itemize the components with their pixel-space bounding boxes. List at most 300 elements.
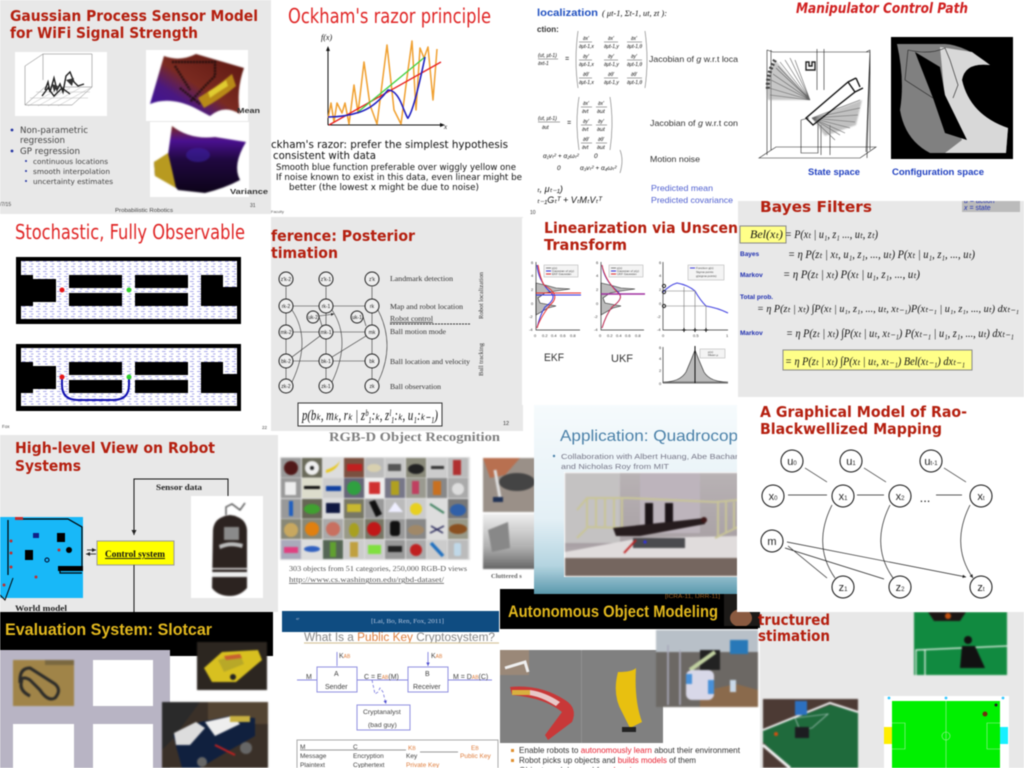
text: network layer labels: Ball motion mode <box>390 327 447 336</box>
heading: autonomous object modeling: [ICRA-11, IJRR-11] <box>665 594 721 600</box>
chart: EKF: 0 <box>534 333 537 338</box>
arrows: world model to control <box>86 550 96 554</box>
text: UKF label: UKF <box>611 353 633 365</box>
chart: UKF: 0 <box>599 333 602 338</box>
chart: soccer field particles <box>884 696 1009 768</box>
text: bullet list: smooth interpolation <box>33 168 110 176</box>
text: Jacobian and noise descriptions: Jacobian of g w.r.t con <box>650 118 738 128</box>
panel: Gaussian process sensor model <box>0 0 271 214</box>
text: network layer labels <box>390 272 485 391</box>
heading: high-level view <box>15 439 215 475</box>
text: robot modeling bullets: Robot picks up objects and builds models of them <box>519 755 696 765</box>
diagram: dynamic Bayes network: zk-1 <box>321 384 331 390</box>
diagram: dynamic Bayes network: bk <box>369 359 375 365</box>
diagram: sender receiver: B <box>425 671 430 678</box>
heading: application quadrocopter: Application: Quadrocop <box>560 428 738 445</box>
chart: Jacobian of g w.r.t location: ∂μt-1,y <box>604 62 619 68</box>
chart: EKF <box>529 260 581 338</box>
diagram: sender receiver: Sender <box>325 684 348 691</box>
diagram: sender receiver: KAB <box>431 653 443 660</box>
chart: Jacobian of g w.r.t control <box>538 97 612 151</box>
panel: inference posterior estimation <box>271 217 523 431</box>
chart: Jacobian of g w.r.t location: ∂x' <box>608 36 615 42</box>
chart: Jacobian of g w.r.t control: ∂θ' <box>583 137 590 143</box>
text: robot modeling bullets <box>511 745 741 768</box>
formula: result <box>783 350 972 370</box>
text: network layer labels: Robot control <box>390 314 433 323</box>
heading: autonomous object modeling: Autonomous Object Modeling <box>508 603 718 621</box>
formula: posterior <box>298 403 442 426</box>
chart: UKF: 0.8 <box>635 333 641 338</box>
chart: Jacobian of g w.r.t location: ∂μt-1,θ <box>627 44 642 50</box>
diagram: dynamic Bayes network: z'k-2 <box>281 277 291 283</box>
photo: instrumented slot car <box>162 702 268 768</box>
diagram: Rao-Blackwellized network: z2 <box>896 582 905 594</box>
diagram: dynamic Bayes network: bk-1 <box>321 359 331 365</box>
text: network layer labels: Ball tracking <box>479 343 485 376</box>
formula: total probability <box>740 294 1019 315</box>
chart: policy map 2 with path <box>16 344 241 411</box>
table: terminology <box>297 740 498 768</box>
text: collaboration: Collaboration with Albert Huang, Abe Bachar <box>561 454 739 461</box>
heading: Gaussian process: Gaussian Process Sensor Model <box>10 7 258 25</box>
chart: Jacobian of g w.r.t location: (ut, μt-1) <box>538 53 557 59</box>
formula: result: = η P(zₜ | xₜ) ∫P(xₜ | uₜ, xₜ₋₁) Bel(xₜ₋₁) dxₜ₋₁ <box>785 354 965 368</box>
box: control system <box>97 541 174 565</box>
heading: evaluation system: Evaluation System: Slotcar <box>5 620 212 639</box>
text: slide number: Fox <box>2 424 10 429</box>
chart: Jacobian of g w.r.t control: = <box>567 120 571 127</box>
chart: EKF: 2 <box>531 287 534 292</box>
diagram: Rao-Blackwellized network: u0 <box>787 456 797 468</box>
chart: function g with sigma points: Sigma points <box>696 270 714 274</box>
chart: EKF: 0.8 <box>570 333 576 338</box>
diagram: sender receiver: (bad guy) <box>368 722 397 729</box>
diagram: sender receiver: Cryptanalyst <box>363 709 401 716</box>
diagram: sender receiver: A <box>334 671 339 678</box>
banner: citation: [Lai, Bo, Ren, Fox, 2011] <box>371 618 444 625</box>
chart: 3D WiFi signal scatter <box>15 52 107 116</box>
formula: belief: Bel(xₜ) <box>750 227 783 241</box>
chart: EKF: Gaussian of p(y) <box>552 269 574 273</box>
chart: UKF: 0.4 <box>616 333 622 338</box>
chart: EKF: 4 <box>531 273 534 278</box>
photo: mobile robot <box>191 496 263 598</box>
chart: function g with sigma points: -2 <box>657 314 661 319</box>
chart: function g with sigma points: Function g(x) <box>696 266 714 270</box>
diagram: Rao-Blackwellized network: u1 <box>846 456 856 468</box>
text: slide footer: Probabilistic Robotics <box>115 208 174 214</box>
chart: Gaussian: Mean μ <box>708 353 718 357</box>
table: terminology: Message <box>300 753 327 760</box>
panel: public key cryptosystem <box>282 611 500 768</box>
diagram: Rao-Blackwellized network: zt <box>977 582 985 594</box>
formula: Markov step 2: Markov <box>740 330 763 337</box>
table: terminology: EB <box>471 745 479 752</box>
diagram: Rao-Blackwellized network: m <box>767 536 777 548</box>
text: network layer labels: Ball observation <box>390 382 441 391</box>
chart: UKF: 2 <box>596 287 599 292</box>
text: bullet list: Non-parametric <box>20 126 88 136</box>
heading: linearization: Linearization via Unscen <box>544 219 738 237</box>
text: predicted mean and covariance: Predicted mean <box>651 183 713 193</box>
chart: Jacobian of g w.r.t location: ∂μt-1,θ <box>627 62 642 68</box>
text: Ockham footer: Faculty <box>271 209 284 214</box>
chart: motion noise matrix <box>543 150 622 173</box>
text: slide footer: /7/15 <box>0 202 11 208</box>
heading: structured estimation: stimation <box>758 627 830 645</box>
chart: policy map 1 <box>16 257 241 324</box>
table: terminology: Public Key <box>460 753 491 760</box>
chart: UKF: UKF Gaussian <box>617 272 637 276</box>
chart: Gaussian: 2 <box>659 368 662 373</box>
table: terminology: M <box>300 744 305 751</box>
chart: UKF: 0.6 <box>625 333 631 338</box>
chart: EKF: 0 <box>531 301 534 306</box>
photo: cluttered scene <box>483 458 538 512</box>
text: Jacobian and noise descriptions: Motion noise <box>650 154 700 164</box>
chart: Jacobian of g w.r.t location: ∂μt-1,θ <box>627 80 642 86</box>
chart: EKF: -2 <box>529 314 533 319</box>
arrow: control output <box>133 565 135 612</box>
diagram: sender receiver: M <box>306 674 312 681</box>
table: terminology: Encryption <box>353 753 384 760</box>
text: sensor data label: Sensor data <box>156 482 203 492</box>
diagram: sender receiver: KAB <box>339 653 351 660</box>
text: network layer labels: Map and robot location <box>390 302 463 311</box>
text: network layer labels: Landmark detection <box>390 274 453 283</box>
chart: Jacobian of g w.r.t control: ∂x' <box>583 101 590 107</box>
text: predicted mean and covariance: ₜ, μₜ₋₁) <box>537 184 563 194</box>
chart: function g with sigma points: 6 <box>659 260 662 265</box>
chart: Jacobian of g w.r.t control: ∂vt <box>582 109 589 115</box>
formula: total probability: Total prob. <box>740 294 773 301</box>
text: slide number: 22 <box>262 425 268 430</box>
legend: state: x = state <box>963 205 991 212</box>
text: dataset description <box>289 564 467 584</box>
diagram: dynamic Bayes network: rk-2 <box>282 304 291 310</box>
chart: Jacobian of g w.r.t control: ∂vt <box>582 127 589 133</box>
panel: graphical model of Rao-Blackwellized mapping <box>737 397 1024 612</box>
chart: UKF: 0.2 <box>607 333 613 338</box>
photo grid: object categories <box>280 457 470 560</box>
diagram: Rao-Blackwellized network: x0 <box>769 491 778 503</box>
chart: Jacobian of g w.r.t control: ∂ωt <box>597 145 605 151</box>
diagram: dynamic Bayes network: uk-2 <box>308 315 318 321</box>
heading: graphical model: Blackwellized Mapping <box>760 420 942 438</box>
legend: state: u = action <box>964 198 995 205</box>
chart: motion noise matrix: α₁vₜ² + α₂ωₜ² <box>543 153 580 160</box>
chart: Jacobian of g w.r.t location: ∂y' <box>608 54 615 60</box>
chart: variance surface <box>150 122 249 197</box>
diagram: dynamic Bayes network: uk-1 <box>352 315 362 321</box>
chart: Jacobian of g w.r.t control: ∂y' <box>598 119 605 125</box>
chart: configuration space map <box>891 37 1013 159</box>
chart: UKF: 6 <box>596 260 599 265</box>
text: mean label: Mean <box>237 106 261 115</box>
heading: localization: localization <box>537 8 598 19</box>
heading: high-level view: Systems <box>15 457 81 475</box>
chart: EKF: 6 <box>531 260 534 265</box>
chart: function g with sigma points: 0 <box>662 333 665 338</box>
photo: soccer robots overhead <box>914 612 1007 675</box>
text: predicted mean and covariance: ₜ₋₁Gₜᵀ + VₜMₜVₜᵀ <box>537 195 603 205</box>
text: collaboration <box>553 454 739 471</box>
heading: localization: ( μt-1, Σt-1, ut, zt ): <box>602 9 667 18</box>
banner: citation <box>282 611 499 632</box>
chart: Jacobian of g w.r.t location: ∂μt-1,y <box>604 44 619 50</box>
chart: Jacobian of g w.r.t control: ∂x' <box>598 101 605 107</box>
diagram: dynamic Bayes network: z'k <box>369 277 375 283</box>
chart: Jacobian of g w.r.t control: ∂ut <box>542 125 549 131</box>
heading: evaluation system <box>0 612 273 656</box>
panel: Ockham's razor <box>271 0 530 217</box>
formula: Bayes step: Bayes <box>740 251 760 258</box>
text: robot modeling bullets: Enable robots to autonomously learn about their environment <box>519 745 741 755</box>
photo: slot car track <box>13 660 74 706</box>
heading: autonomous object modeling <box>500 589 758 629</box>
chart: Jacobian of g w.r.t location: ∂y' <box>631 54 638 60</box>
chart: EKF: 0.6 <box>560 333 566 338</box>
table: terminology: C <box>353 744 358 751</box>
chart: state space robot arm <box>759 49 876 158</box>
panel: manipulator control path <box>738 0 1024 201</box>
chart: UKF: Gaussian of p(y) <box>617 269 639 273</box>
box: control system: Control system <box>105 550 165 560</box>
heading: structured estimation: tructured <box>758 611 830 629</box>
diagram: dynamic Bayes network: mk-2 <box>280 330 292 336</box>
chart: Jacobian of g w.r.t control: ∂vt <box>582 145 589 151</box>
chart: Jacobian of g w.r.t control: ∂θ' <box>598 137 605 143</box>
text: bullet list: uncertainty estimates <box>33 178 113 186</box>
heading: inference: timation <box>271 244 338 262</box>
text: slide number 12: 12 <box>503 421 509 427</box>
diagram: sender receiver: C = EAB(M) <box>364 674 399 681</box>
diagram: dynamic Bayes network: mk <box>369 330 376 336</box>
photo: object models <box>500 650 663 743</box>
heading: linearization <box>544 219 738 254</box>
chart: Jacobian of g w.r.t location: ∂y' <box>583 54 590 60</box>
chart: Jacobian of g w.r.t location: ∂θ' <box>608 72 615 78</box>
chart: Jacobian of g w.r.t location: ∂xt-1 <box>538 61 549 67</box>
legend: state <box>962 198 1020 212</box>
photo: quadrocopter <box>564 472 738 577</box>
heading: structured estimation <box>758 611 830 645</box>
panel: quadrocopter application <box>534 405 739 594</box>
photo: presenter face <box>724 590 760 628</box>
photo: robot lab <box>656 630 758 707</box>
chart: curve fitting: f(x) <box>321 33 332 42</box>
diagram: dynamic Bayes network: zk <box>370 384 375 390</box>
chart: UKF: -4 <box>594 327 598 332</box>
text: state space label: State space <box>808 167 860 177</box>
text: slide footer: 31 <box>250 203 256 209</box>
chart: Jacobian of g w.r.t location: ∂θ' <box>631 72 638 78</box>
diagram: sender receiver <box>297 652 492 730</box>
chart: UKF: -2 <box>594 314 598 319</box>
heading: linearization: Transform <box>544 236 627 254</box>
heading: Gaussian process <box>10 7 258 42</box>
chart: function g with sigma points <box>657 260 729 338</box>
text: Ockham's razor explanation: better (the lowest x might be due to noise) <box>289 183 479 193</box>
text: Ockham's razor explanation: consistent with data <box>273 149 376 162</box>
text: predicted mean and covariance: Predicted covariance <box>651 195 733 205</box>
formula: belief <box>740 226 878 243</box>
panel: evaluation system slotcar <box>0 612 278 768</box>
table: terminology: Key <box>406 753 418 760</box>
text: variance label: Variance <box>230 187 268 196</box>
chart: EKF: p(x) <box>552 266 557 270</box>
formula: Bayes step: = η P(zₜ | xₜ, u₁, z₁, ..., uₜ) P(xₜ | u₁, z₁, ..., uₜ) <box>788 247 975 261</box>
chart: UKF: 0 <box>596 301 599 306</box>
text: slide number <box>2 424 268 430</box>
chart: UKF <box>594 260 645 338</box>
chart: function g with sigma points: 0 <box>659 301 662 306</box>
diagram: Rao-Blackwellized network <box>761 450 992 598</box>
text: cluttered caption: Cluttered s <box>491 573 522 580</box>
chart: EKF: EKF Gaussian <box>552 272 572 276</box>
diagram: Rao-Blackwellized network: z1 <box>839 582 848 594</box>
text: Jacobian and noise descriptions <box>649 54 738 164</box>
diagram: dynamic Bayes network: bk-2 <box>281 359 291 365</box>
panel: high-level view on robot systems <box>0 435 278 613</box>
chart: Jacobian of g w.r.t location: ∂μt-1,x <box>579 80 594 86</box>
heading: Gaussian process: for WiFi Signal Strength <box>10 24 198 42</box>
chart: Gaussian: 6 <box>659 345 662 350</box>
chart: function g with sigma points: -4 <box>657 327 661 332</box>
heading: inference: ference: Posterior <box>271 227 416 245</box>
map: world model <box>0 517 83 600</box>
table: terminology: KB <box>408 745 416 752</box>
chart: function g with sigma points: 0.5 <box>693 333 699 338</box>
diagram: dynamic Bayes network: rk-1 <box>322 304 331 310</box>
chart: Jacobian of g w.r.t location: ∂μt-1,y <box>604 80 619 86</box>
chart: motion noise matrix: 0 <box>557 165 561 172</box>
panel: autonomous object modeling <box>500 589 762 768</box>
panel: linearization via unscented transform <box>522 218 738 405</box>
panel: stochastic fully observable <box>0 215 271 435</box>
formula: Markov step <box>740 267 920 281</box>
chart: Jacobian of g w.r.t control: ∂ωt <box>597 127 605 133</box>
formula: posterior: p(bₖ, mₖ, rₖ | zᵇ₁:ₖ, zˡ₁:ₖ, u₁:ₖ₋₁) <box>301 408 438 424</box>
heading: public key cryptosystem: What Is a Public Key Cryptosystem? <box>304 632 495 644</box>
chart: Gaussian: 0 <box>659 381 662 386</box>
heading: localization <box>537 8 667 19</box>
chart: Gaussian: 4 <box>659 356 662 361</box>
chart: motion noise matrix: α₃vₜ² + α₄ωₜ² <box>580 165 617 172</box>
text: EKF label: EKF <box>544 352 564 364</box>
chart: function g with sigma points: g(sigma points) <box>696 274 717 278</box>
chart: function g with sigma points: 2 <box>659 287 662 292</box>
panel: RGB-D object recognition <box>278 429 538 611</box>
chart: Jacobian of g w.r.t location: ∂μt-1,x <box>579 44 594 50</box>
text: slide footer <box>0 202 256 214</box>
diagram: Rao-Blackwellized network: xt <box>977 491 985 503</box>
chart: Jacobian of g w.r.t location: ∂μt-1,x <box>579 62 594 68</box>
diagram: sender receiver: Receiver <box>413 684 441 691</box>
heading: graphical model <box>760 403 967 438</box>
text: collaboration: and Nicholas Roy from MIT <box>561 464 670 471</box>
heading: inference <box>271 227 416 262</box>
text: bullet list: regression <box>20 136 65 146</box>
heading: high-level view: High-level View on Robot <box>15 439 215 457</box>
diagram: Rao-Blackwellized network: ... <box>920 490 930 505</box>
panel: Bayes filters <box>738 198 1024 397</box>
heading: RGB-D: RGB-D Object Recognition <box>329 429 501 444</box>
diagram: dynamic Bayes network <box>279 272 387 393</box>
text: Ockham's razor explanation <box>271 138 522 193</box>
text: bullet list: continuous locations <box>33 158 108 166</box>
chart: empty plots <box>13 660 153 768</box>
arrow: sensor data loop <box>134 479 228 535</box>
diagram: Rao-Blackwellized network: x2 <box>896 491 905 503</box>
text: Ockham's razor explanation: ckham's razor: prefer the simplest hypothesis <box>271 138 508 151</box>
chart: Jacobian of g w.r.t location: = <box>565 56 569 63</box>
formula: Markov step: Markov <box>740 272 763 279</box>
photo: depth image <box>483 514 538 569</box>
heading: Ockham's razor principle: Ockham's razor principle <box>288 4 491 28</box>
formula: Markov step: = η P(zₜ | xₜ) P(xₜ | u₁, z₁, ..., uₜ) <box>783 267 920 281</box>
chart: motion noise matrix: 0 <box>594 153 598 160</box>
chart: curve fitting <box>321 33 448 131</box>
photo: robot on field <box>763 699 858 768</box>
chart: EKF: 0.4 <box>551 333 557 338</box>
text: Jacobian and noise descriptions: Jacobian of g w.r.t loca <box>649 54 738 64</box>
heading: stochastic: Stochastic, Fully Observable <box>15 220 245 244</box>
chart: EKF: 0.2 <box>542 333 548 338</box>
heading: graphical model: A Graphical Model of Rao- <box>760 403 967 421</box>
chart: Gaussian: p(x) <box>708 350 713 354</box>
diagram: dynamic Bayes network: z'k-1 <box>321 277 331 283</box>
chart: mean surface <box>146 50 248 121</box>
chart: function g with sigma points: 4 <box>659 273 662 278</box>
heading: Bayes filters: Bayes Filters <box>760 198 872 216</box>
chart: Jacobian of g w.r.t control: (ut, μt-1) <box>538 116 557 122</box>
panel: structured estimation soccer <box>758 611 1024 768</box>
text: bullet list <box>11 126 113 186</box>
text: Ockham's razor explanation: Smooth blue function preferable over wiggly yellow one <box>276 163 516 173</box>
text: dataset description: http://www.cs.washington.edu/rgbd-dataset/ <box>289 575 445 584</box>
diagram: dynamic Bayes network: rk <box>370 304 375 310</box>
chart: Jacobian of g w.r.t location: ∂x' <box>583 36 590 42</box>
text: predicted mean and covariance: 10 <box>530 210 536 216</box>
diagram: Rao-Blackwellized network: x1 <box>839 491 848 503</box>
heading: manipulator control path: Manipulator Control Path <box>796 1 968 17</box>
diagram: Rao-Blackwellized network: ut-1 <box>924 456 938 468</box>
text: world model label: World model <box>15 604 68 613</box>
chart: Jacobian of g w.r.t location <box>538 31 647 88</box>
text: network layer labels: Ball location and velocity <box>390 357 470 366</box>
chart: Gaussian <box>659 345 728 386</box>
formula: belief: = P(xₜ | u₁, z₁ ..., uₜ, zₜ) <box>785 227 878 241</box>
chart: EKF: -4 <box>529 327 533 332</box>
chart: Jacobian of g w.r.t location: ∂θ' <box>583 72 590 78</box>
text: configuration space label: Configuration space <box>892 167 984 177</box>
diagram: dynamic Bayes network: mk-1 <box>320 330 332 336</box>
photo: yellow slot car <box>197 642 267 690</box>
chart: Jacobian of g w.r.t control: ∂y' <box>583 119 590 125</box>
banner: citation: 47 <box>296 617 300 621</box>
chart: Jacobian of g w.r.t location: ∂x' <box>631 36 638 42</box>
chart: function g with sigma points: 1 <box>726 333 729 338</box>
chart: Jacobian of g w.r.t control: ∂ωt <box>597 109 605 115</box>
chart: UKF: 4 <box>596 273 599 278</box>
text: dataset description: 303 objects from 51 categories, 250,000 RGB-D views <box>289 564 467 573</box>
chart: UKF: p(x) <box>617 266 622 270</box>
diagram: sender receiver: M = DAB(C) <box>453 674 488 681</box>
text: predicted mean and covariance <box>530 183 733 216</box>
chart: curve fitting: x <box>443 123 448 131</box>
